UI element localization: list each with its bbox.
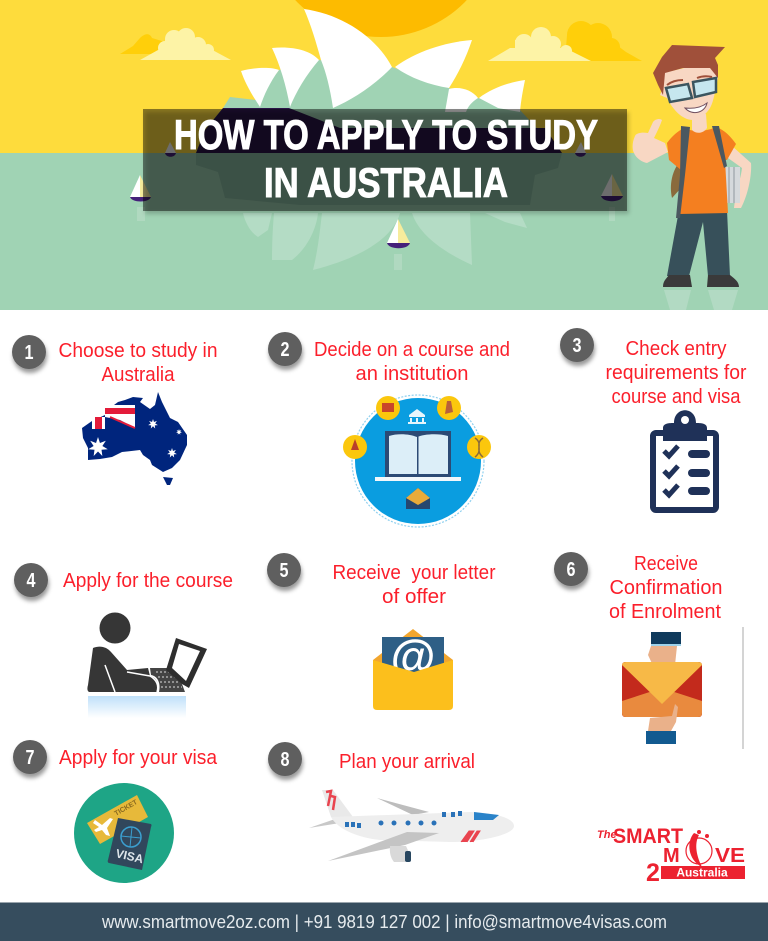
number badge 4: 4 bbox=[26, 570, 36, 592]
number badge 3: 3 bbox=[572, 335, 582, 357]
reflection bbox=[664, 290, 738, 310]
icon: visa and ticket: VISA bbox=[114, 846, 145, 866]
icon: sailboat right bbox=[601, 174, 623, 221]
step 3 label bbox=[606, 338, 747, 408]
footer contact text: www.smartmove2oz.com | +91 9819 127 002 | info@smartmove4visas.com bbox=[101, 912, 667, 932]
step 2 label: an institution bbox=[356, 363, 468, 385]
title bbox=[174, 111, 598, 206]
shirt bbox=[667, 127, 736, 214]
straps bbox=[676, 126, 727, 218]
step 3 bbox=[560, 328, 747, 510]
icon: visa and ticket: TICKET bbox=[114, 799, 140, 818]
number badge 1 bbox=[12, 335, 46, 369]
icon: study circle with book bbox=[343, 395, 491, 527]
step 5 label: Receive your letter bbox=[332, 562, 496, 584]
step 8 bbox=[268, 742, 514, 862]
title: HOW TO APPLY TO STUDY bbox=[174, 111, 598, 158]
icon: sailboat left bbox=[130, 175, 151, 221]
neck bbox=[692, 114, 707, 133]
icon: email envelope: @ bbox=[391, 630, 435, 682]
title: IN AUSTRALIA bbox=[264, 159, 508, 206]
arm right bbox=[728, 146, 751, 208]
step 5 label: of offer bbox=[382, 586, 446, 608]
step 7 label: Apply for your visa bbox=[59, 747, 218, 769]
shoes bbox=[663, 275, 739, 287]
logo: The Smart Move 2 Australia: M bbox=[663, 845, 680, 867]
logo: The Smart Move 2 Australia: SMART bbox=[613, 825, 683, 848]
number badge 6 bbox=[554, 552, 588, 586]
number badge 3 bbox=[560, 328, 594, 362]
step 4 bbox=[14, 563, 233, 718]
icon: airplane bbox=[309, 790, 514, 862]
step 1 label bbox=[58, 340, 218, 386]
step 3 label: Check entry bbox=[626, 338, 726, 360]
number badge 7 bbox=[13, 740, 47, 774]
step 2 label: Decide on a course and bbox=[314, 339, 510, 361]
icon: opera house bbox=[196, 9, 562, 153]
number badge 7: 7 bbox=[26, 747, 34, 769]
number badge 5 bbox=[267, 553, 301, 587]
logo: The Smart Move 2 Australia: VE bbox=[715, 845, 745, 867]
icon: small sailboat left bbox=[165, 142, 176, 157]
step 8 label: Plan your arrival bbox=[339, 751, 475, 773]
step 2 bbox=[268, 332, 510, 527]
icon: right cloud bbox=[488, 21, 642, 61]
smile bbox=[685, 103, 707, 113]
number badge 5: 5 bbox=[280, 560, 288, 582]
logo: The Smart Move 2 Australia bbox=[597, 825, 745, 887]
step 1 bbox=[12, 335, 218, 485]
icon: clipboard checklist bbox=[653, 410, 716, 510]
step 6 label: Receive bbox=[634, 553, 698, 575]
icon: sailboat centre bbox=[387, 219, 410, 270]
footer bar bbox=[0, 902, 768, 941]
step 5 label bbox=[332, 562, 496, 608]
hero banner bbox=[0, 0, 768, 310]
number badge 8 bbox=[268, 742, 302, 776]
number badge 8: 8 bbox=[280, 749, 290, 771]
water reflection of opera house bbox=[243, 213, 527, 270]
step 1 label: Australia bbox=[102, 364, 175, 386]
step 6 label: of Enrolment bbox=[609, 601, 721, 623]
icon: sun bbox=[263, 0, 499, 37]
step 6 label bbox=[609, 553, 722, 623]
step 1 label: Choose to study in bbox=[58, 340, 218, 362]
reflection of building bbox=[196, 153, 562, 205]
icon: Australia flag map bbox=[82, 392, 187, 485]
icon: left cloud bbox=[120, 28, 231, 60]
step 3 label: course and visa bbox=[612, 386, 741, 408]
number badge 2 bbox=[268, 332, 302, 366]
step 6 label: Confirmation bbox=[610, 577, 722, 599]
face bbox=[660, 62, 718, 120]
number badge 1: 1 bbox=[24, 342, 34, 364]
books bbox=[725, 167, 740, 203]
title panel bbox=[143, 109, 627, 211]
icon: visa and ticket bbox=[74, 783, 174, 883]
logo: The Smart Move 2 Australia: Australia bbox=[676, 866, 728, 880]
icon: envelope between two hands bbox=[622, 632, 702, 744]
step 2 label bbox=[314, 339, 510, 385]
student character bbox=[633, 45, 751, 310]
step 4 label: Apply for the course bbox=[63, 570, 233, 592]
step 3 label: requirements for bbox=[606, 362, 747, 384]
icon: person at laptop bbox=[87, 612, 207, 718]
vertical rule bbox=[742, 627, 744, 749]
logo: The Smart Move 2 Australia: The bbox=[597, 829, 617, 841]
icon: small sailboat right bbox=[575, 142, 586, 157]
number badge 6: 6 bbox=[566, 559, 576, 581]
number badge 4 bbox=[14, 563, 48, 597]
thumbs up hand bbox=[633, 119, 668, 163]
logo: The Smart Move 2 Australia: 2 bbox=[646, 859, 660, 887]
step 6 bbox=[554, 552, 744, 749]
trousers bbox=[667, 210, 730, 276]
icon: email envelope bbox=[373, 629, 453, 710]
step 5 bbox=[267, 553, 496, 710]
hair bbox=[653, 45, 725, 95]
glasses bbox=[666, 78, 716, 102]
backpack bbox=[671, 160, 681, 198]
step 7 bbox=[13, 740, 218, 883]
number badge 2: 2 bbox=[280, 339, 290, 361]
brows bbox=[667, 76, 712, 85]
